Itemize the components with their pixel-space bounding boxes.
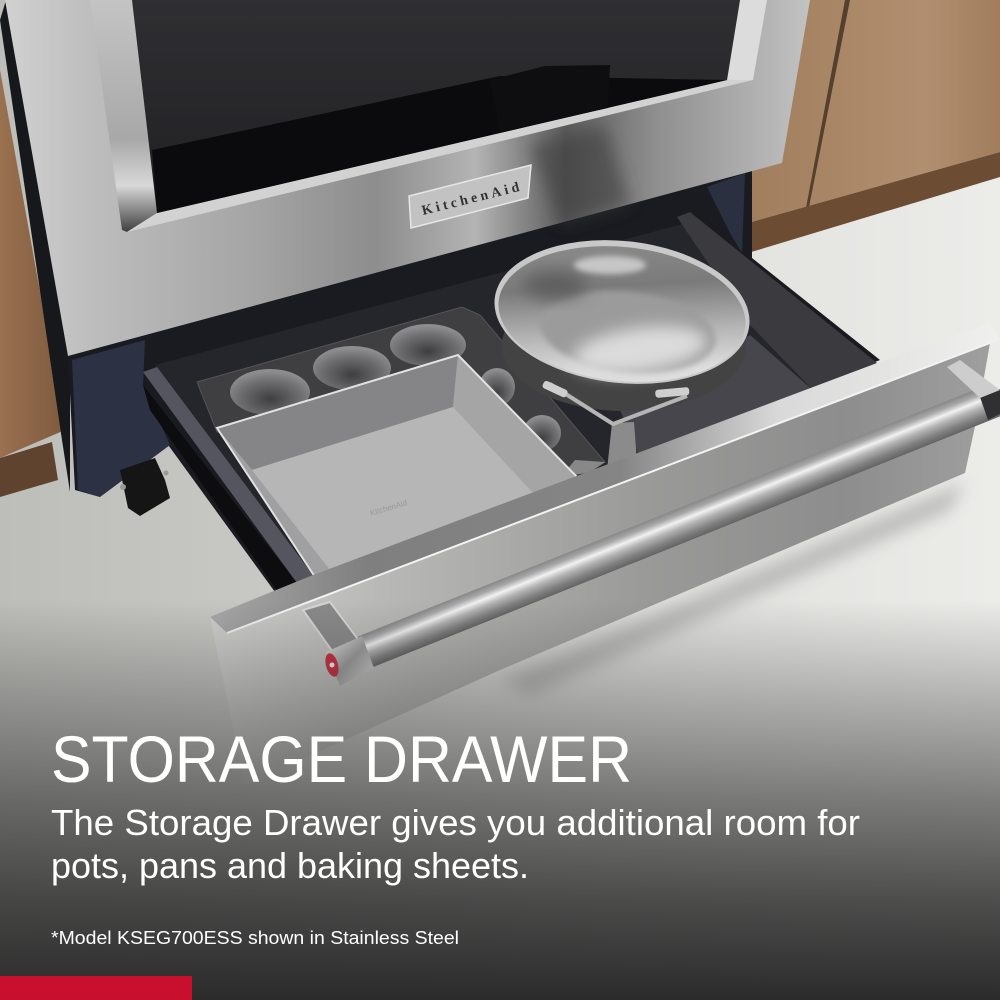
square baking pan bbox=[217, 355, 577, 580]
drawer right wall bbox=[677, 212, 877, 392]
KitchenAid badge: KitchenAid bbox=[420, 180, 521, 219]
highlight line on drawer edge bbox=[227, 343, 990, 633]
drawer handle bbox=[339, 384, 1000, 676]
right handle bracket bbox=[947, 360, 1000, 398]
enamel side wall bbox=[72, 340, 170, 497]
leveling foot bbox=[120, 458, 170, 516]
enamel back corner bbox=[707, 173, 745, 253]
dark gradient overlay bbox=[0, 600, 1000, 1000]
drawer floor bbox=[155, 222, 820, 578]
drawer floor lit section bbox=[620, 335, 815, 458]
description bbox=[51, 802, 860, 886]
lower door trim bbox=[127, 80, 753, 232]
right wood cabinet bbox=[748, 0, 1000, 253]
description: pots, pans and baking sheets. bbox=[51, 845, 529, 886]
left handle bracket bbox=[303, 602, 374, 686]
oven window bbox=[132, 0, 740, 213]
left door trim bbox=[90, 0, 157, 232]
description: The Storage Drawer gives you additional room for bbox=[51, 802, 860, 843]
soft reflection on oven bbox=[530, 125, 630, 225]
cavity under oven bbox=[68, 168, 880, 592]
red accent bar bbox=[0, 976, 192, 1000]
steel frying pan bbox=[487, 228, 757, 470]
shadow under drawer bbox=[500, 482, 965, 695]
square baking pan: KitchenAid bbox=[369, 498, 408, 518]
footnote: *Model KSEG700ESS shown in Stainless Steel bbox=[51, 928, 459, 948]
muffin pan bbox=[197, 307, 605, 478]
oven body bbox=[5, 0, 810, 356]
shadow strip beside oven bbox=[0, 0, 70, 492]
right door trim bbox=[727, 0, 767, 80]
drawer top edge bbox=[210, 323, 1000, 633]
KitchenAid badge bbox=[409, 165, 531, 228]
title: STORAGE DRAWER bbox=[51, 722, 632, 796]
drawer left rail bbox=[143, 367, 313, 592]
left wood cabinet bbox=[0, 70, 65, 497]
drawer front bbox=[210, 343, 990, 785]
